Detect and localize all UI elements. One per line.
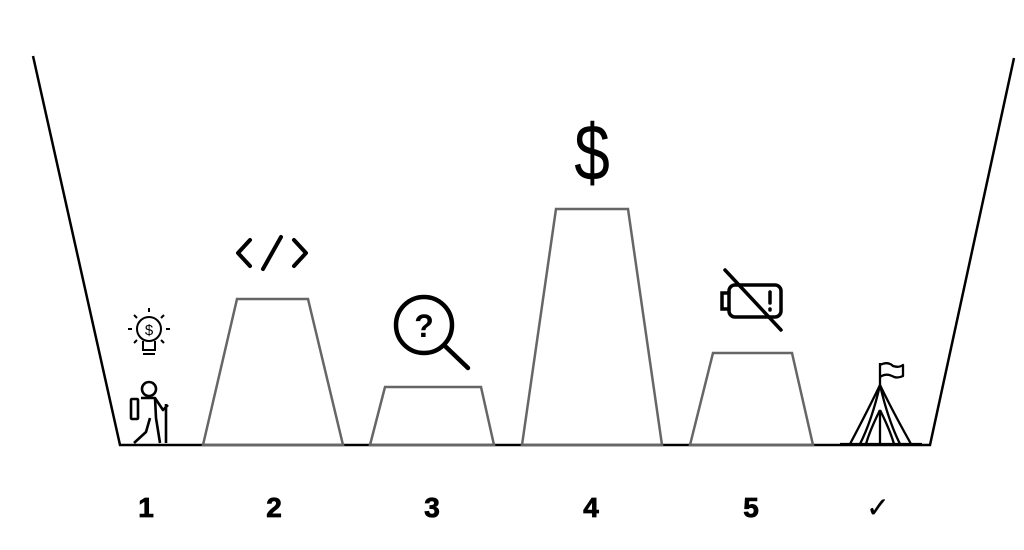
- mountain 5: [690, 353, 813, 445]
- mountain 4: [522, 209, 662, 445]
- step labels: 4: [583, 492, 599, 523]
- icon: tent with flag: [840, 363, 922, 444]
- icon: magnifier with question: [396, 297, 468, 368]
- step labels: 2: [266, 492, 282, 523]
- step labels: 5: [743, 492, 759, 523]
- step labels: [138, 491, 890, 524]
- icon: hiker: [131, 382, 168, 443]
- icon: lightbulb with dollar: [128, 308, 170, 354]
- mountain 3: [370, 387, 494, 445]
- step labels: 1: [138, 492, 154, 523]
- valley outline: [33, 56, 1014, 445]
- step labels: 3: [424, 492, 440, 523]
- step labels: ✓: [866, 491, 890, 524]
- icon: dollar: $: [574, 108, 610, 198]
- icon: code brackets: [238, 237, 306, 269]
- icon: dead battery: [722, 270, 781, 330]
- mountain 2: [203, 299, 343, 445]
- icon: lightbulb with dollar: $: [145, 322, 154, 339]
- icon: magnifier with question: ?: [414, 308, 434, 344]
